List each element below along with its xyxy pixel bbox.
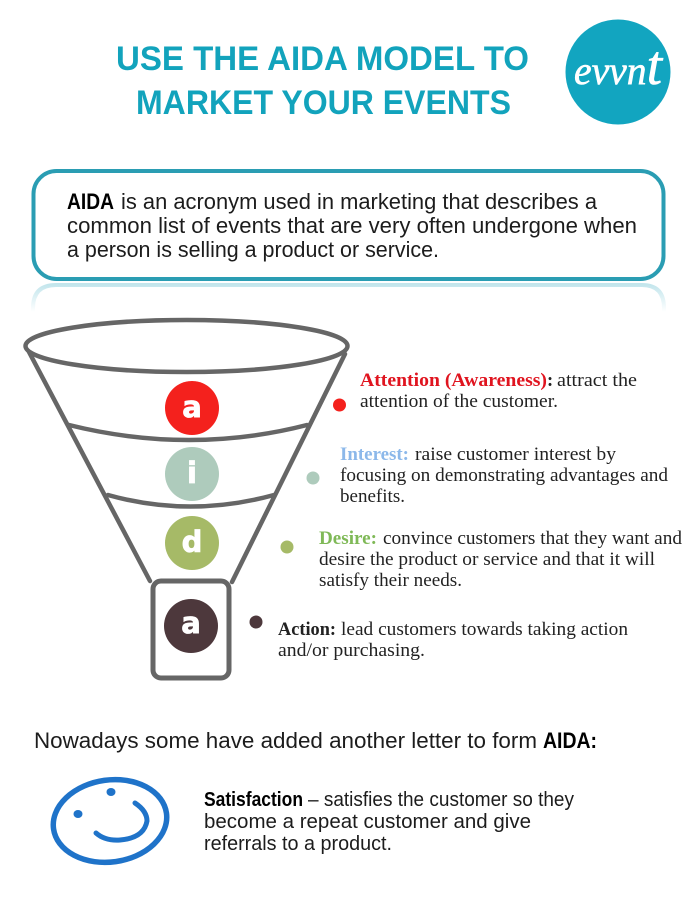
satisfaction text: – satisfies the customer so they (308, 789, 574, 811)
satisfaction text: become a repeat customer and give (204, 811, 531, 833)
attention item: : (547, 371, 553, 391)
stage circle: interest: i (187, 456, 197, 490)
stage circle: desire (165, 516, 219, 570)
desire item: desire the product or service and that it will (319, 550, 655, 570)
icon: smiley face (48, 772, 172, 870)
satisfaction text (204, 789, 574, 855)
stage circle: action: a (181, 606, 201, 640)
logo: evvnt: evvnt (574, 35, 663, 97)
stage circle: interest (165, 447, 219, 501)
interest item: benefits. (340, 487, 405, 507)
action item: Action: (278, 620, 336, 640)
desire item (280, 529, 683, 591)
stage circle: desire: d (182, 525, 202, 559)
definition text: a person is selling a product or service. (67, 237, 439, 262)
desire item: Desire: (319, 529, 377, 549)
panel: AIDA definition (34, 171, 664, 279)
interest item: raise customer interest by (415, 445, 617, 465)
desire item: satisfy their needs. (319, 571, 462, 591)
stage circle: action (164, 599, 218, 653)
title (116, 40, 529, 122)
satisfaction text: Satisfaction (204, 789, 303, 811)
funnel outline (26, 320, 348, 678)
title: USE THE AIDA MODEL TO (116, 40, 529, 78)
definition text: common list of events that are very often undergone when (67, 213, 637, 238)
funnel diagram (26, 320, 348, 678)
desire item: convince customers that they want and (383, 529, 683, 549)
stage circle: attention: a (182, 390, 202, 424)
action item: lead customers towards taking action (341, 620, 628, 640)
attention item: attention of the customer. (360, 392, 558, 412)
action item: and/or purchasing. (278, 641, 425, 661)
stage circle: attention (165, 381, 219, 435)
attention item: Attention (Awareness) (360, 371, 547, 391)
added letter heading: AIDA: (543, 728, 597, 753)
interest item: Interest: (340, 445, 409, 465)
satisfaction text: referrals to a product. (204, 833, 392, 855)
panel reflection (33, 285, 664, 314)
definition text: AIDA (67, 189, 114, 214)
action item (250, 616, 628, 661)
attention item: attract the (557, 371, 637, 391)
definition text: is an acronym used in marketing that describes a (121, 189, 598, 214)
definition text (67, 189, 637, 262)
interest item (306, 445, 669, 507)
logo: evvnt (566, 20, 670, 124)
attention item (333, 371, 637, 412)
interest item: focusing on demonstrating advantages and (340, 466, 669, 486)
title: MARKET YOUR EVENTS (136, 84, 511, 122)
added letter heading: Nowadays some have added another letter to form (34, 728, 537, 753)
